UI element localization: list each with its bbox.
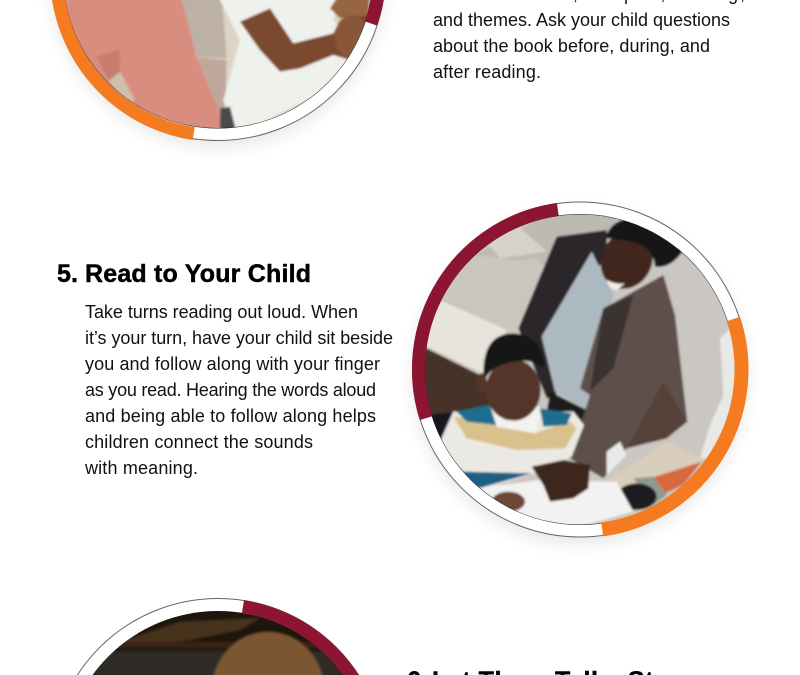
text block: step 5 body: with meaning. (84, 458, 198, 478)
text block: step 5 body: and being able to follow along helps (85, 406, 376, 426)
text block: step 5 body: you and follow along with your finger (85, 354, 380, 374)
text block: step 5 body: as you read. Hearing the words aloud (85, 380, 376, 400)
text block: step 4 continuation: about the book before, during, and (433, 36, 710, 56)
text block: step 5 body: it’s your turn, have your child sit beside (85, 328, 393, 348)
maroon arc (418, 210, 558, 418)
orange arc (602, 319, 742, 530)
text block: step 4 continuation: after reading. (433, 62, 541, 82)
text block: step 4 continuation: and themes. Ask your child questions (433, 10, 730, 30)
heading: step 5: Read to Your Child (85, 260, 311, 288)
maroon arc (371, 0, 380, 24)
photo circle: teacher helping boy read (step 5) (400, 195, 760, 545)
orange arc (57, 0, 194, 134)
text block: step 5 body (84, 302, 393, 478)
text block: step 4 continuation (433, 0, 745, 82)
photo circle: child storytelling (step 6) (76, 598, 360, 675)
maroon arc (243, 606, 362, 675)
photo circle: parent and child reading (step 4) (40, 0, 400, 147)
text block: step 5 body: Take turns reading out loud. When (85, 302, 358, 322)
text block: step 5 body: children connect the sounds (85, 432, 313, 452)
heading: step 5: 5. (57, 260, 78, 288)
